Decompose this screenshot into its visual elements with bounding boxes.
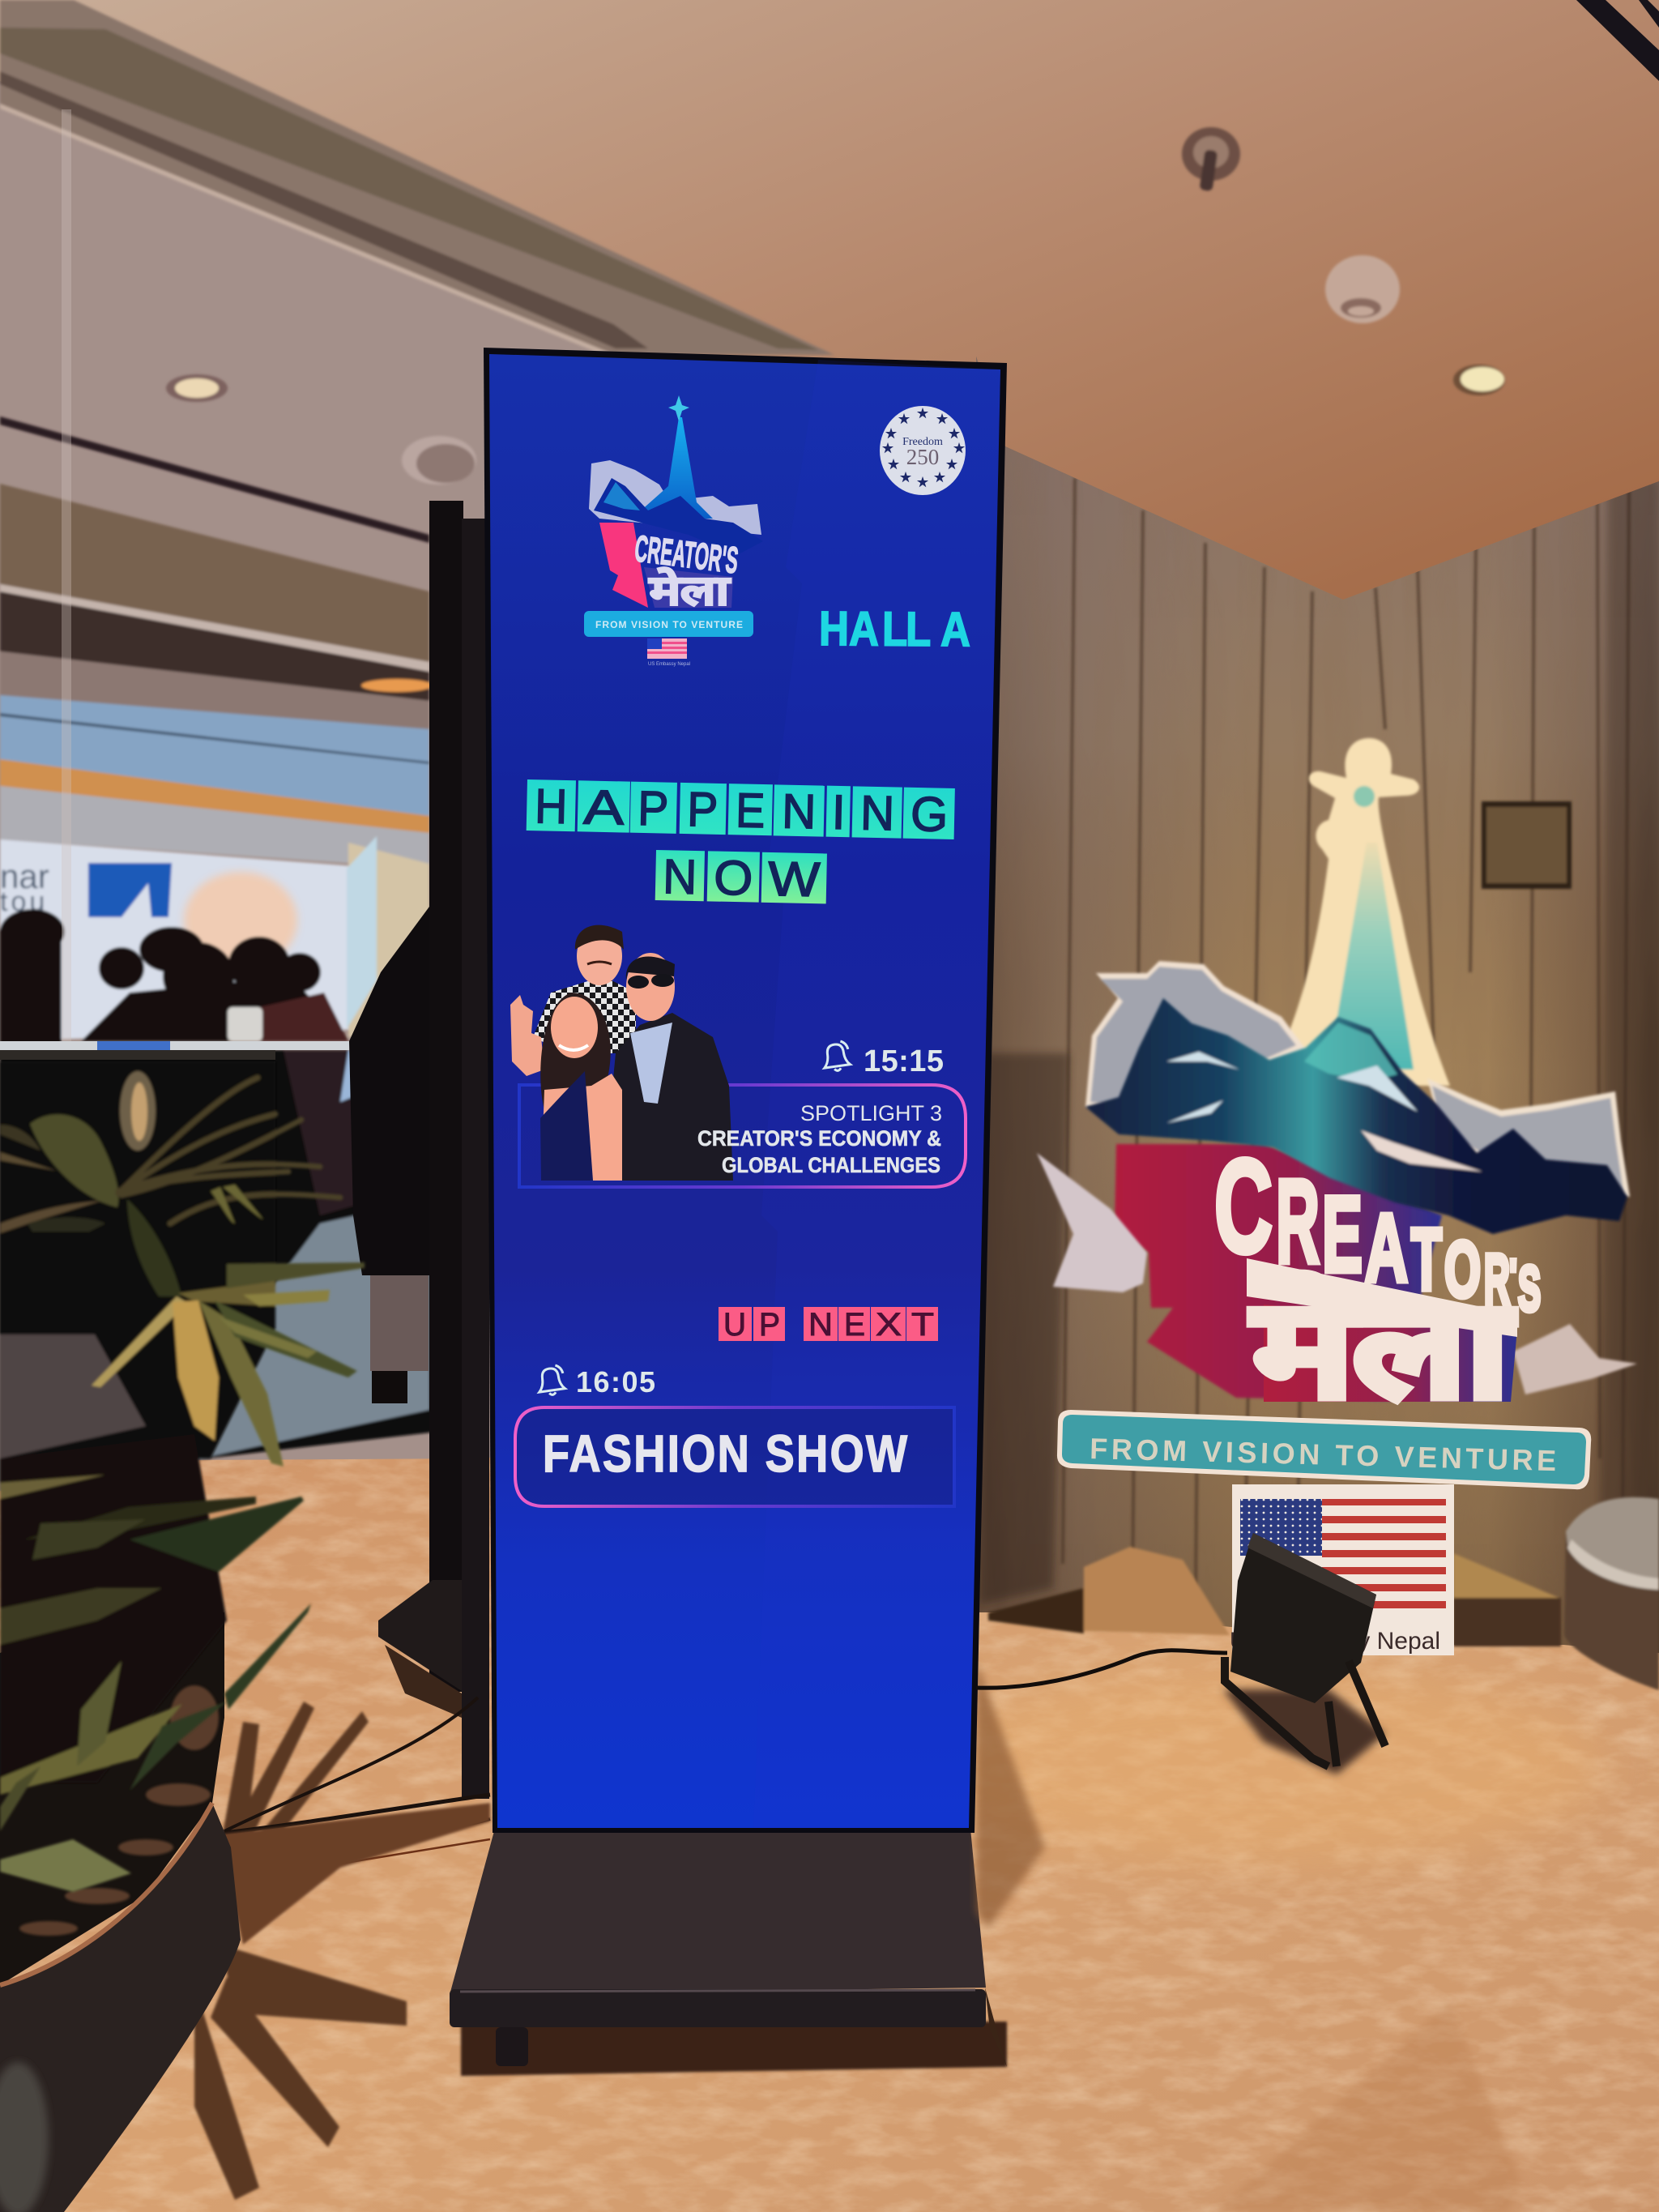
Up Next tiles: U bbox=[723, 1307, 746, 1343]
woman in navy dress bbox=[540, 993, 622, 1181]
logo red block bbox=[599, 523, 648, 608]
logo flag: US Embassy Nepal bbox=[648, 662, 690, 667]
caster wheel bbox=[496, 2027, 528, 2066]
glass shelf bbox=[0, 1041, 437, 1060]
standee red backing block bbox=[1115, 1144, 1442, 1401]
Freedom 250 badge: ★ bbox=[916, 407, 929, 421]
Fashion Show neon frame bbox=[515, 1407, 954, 1506]
Creator's Mela screen logo bbox=[584, 395, 763, 667]
standee left network shard bbox=[1037, 1153, 1147, 1292]
Happening tiles: G bbox=[911, 787, 949, 842]
standee beam and star bbox=[1264, 738, 1450, 1086]
Fashion Show title: FASHION SHOW bbox=[543, 1425, 907, 1483]
time 16:05 bbox=[536, 1364, 655, 1399]
Up Next tiles: N bbox=[808, 1307, 833, 1343]
standee wordmark: R bbox=[1276, 1155, 1320, 1288]
ceiling sprinkler bbox=[1182, 127, 1240, 191]
time 15:15: 15:15 bbox=[864, 1044, 944, 1078]
standee wordmark: O bbox=[1444, 1225, 1481, 1313]
reflected lower scene bbox=[0, 1050, 486, 1491]
palm plant bbox=[0, 1061, 365, 1892]
Freedom 250 badge: ★ bbox=[898, 412, 911, 426]
lit floor in wall recess bbox=[988, 1547, 1561, 1646]
Freedom 250 badge: ★ bbox=[885, 427, 898, 441]
reflected brand logo bbox=[0, 857, 172, 917]
Freedom 250 badge bbox=[880, 406, 966, 495]
standee mountains bbox=[1085, 998, 1627, 1234]
bell icon bbox=[536, 1364, 565, 1397]
Happening tiles: P bbox=[638, 781, 669, 836]
Freedom 250 badge: ★ bbox=[887, 458, 900, 472]
logo clouds bbox=[589, 460, 761, 535]
spotlight text: GLOBAL CHALLENGES bbox=[722, 1153, 940, 1177]
Freedom 250 badge: ★ bbox=[916, 476, 929, 489]
logo light beam bbox=[632, 417, 713, 519]
Freedom 250 badge: ★ bbox=[881, 442, 894, 455]
standee wordmark: A bbox=[1365, 1194, 1408, 1302]
spotlight text: CREATOR'S ECONOMY & bbox=[697, 1126, 941, 1151]
reflected recessed light bbox=[166, 374, 228, 402]
Happening tiles: I bbox=[831, 785, 846, 839]
standee Mela block bbox=[1247, 1258, 1517, 1424]
spotlight neon frame bbox=[519, 1085, 966, 1187]
hall label: HALL A bbox=[819, 601, 970, 656]
standee back clouds bbox=[1085, 961, 1630, 1197]
Happening tiles: N bbox=[782, 784, 817, 839]
floor bbox=[0, 1402, 1659, 2212]
beam across ceiling bbox=[0, 0, 834, 355]
logo wordmark bbox=[633, 527, 740, 613]
Happening tiles: N bbox=[860, 786, 895, 840]
Freedom 250 badge: ★ bbox=[948, 427, 961, 441]
logo tagline bar bbox=[584, 611, 753, 637]
LED screen bbox=[484, 348, 1007, 1833]
green leaflets bbox=[211, 1185, 263, 1223]
wall plaque bbox=[1482, 801, 1572, 889]
Up Next tiles: X bbox=[876, 1307, 902, 1343]
reflected phone bbox=[228, 1007, 262, 1041]
standee tagline banner bbox=[1057, 1410, 1591, 1489]
bell icon bbox=[821, 1040, 851, 1073]
reflected crowd silhouettes bbox=[0, 909, 348, 1045]
spotlight text bbox=[697, 1101, 942, 1177]
digital signage base bbox=[450, 1829, 1007, 2076]
logo tagline bar: FROM VISION TO VENTURE bbox=[595, 619, 743, 630]
logo flag bbox=[647, 638, 690, 667]
Now tiles: O bbox=[714, 851, 753, 905]
standee tagline banner: FROM VISION TO VENTURE bbox=[1090, 1432, 1557, 1477]
standee wordmark: T bbox=[1411, 1210, 1442, 1308]
wood panel wall bbox=[976, 357, 1659, 1653]
Freedom 250 badge: ★ bbox=[945, 458, 958, 472]
Up Next tiles bbox=[719, 1307, 938, 1343]
standee flag panel bbox=[1230, 1484, 1454, 1655]
recessed ceiling light bbox=[1453, 365, 1505, 395]
logo star bbox=[668, 395, 689, 421]
power cable bbox=[976, 1650, 1227, 1688]
sunglasses bbox=[628, 974, 674, 989]
standee wordmark: E bbox=[1322, 1175, 1363, 1295]
back man bbox=[510, 925, 636, 1076]
Up Next tiles: T bbox=[911, 1307, 934, 1343]
spotlight text: SPOTLIGHT 3 bbox=[800, 1101, 942, 1125]
standee flag panel: US Embassy Nepal bbox=[1230, 1628, 1440, 1655]
lower fronds bbox=[0, 1475, 311, 1892]
shadow cast by signage bbox=[976, 1661, 1045, 1928]
black ceiling track bbox=[1576, 0, 1659, 81]
Up Next tiles: P bbox=[759, 1307, 780, 1343]
person in dark coat bbox=[349, 907, 433, 1403]
standee wordmark: R bbox=[1484, 1241, 1510, 1319]
ceiling bbox=[0, 0, 1659, 648]
Happening tiles: P bbox=[687, 782, 719, 837]
cables on floor bbox=[224, 1697, 490, 1864]
stage light bbox=[976, 1533, 1385, 1774]
standee wordmark: ' bbox=[1510, 1252, 1516, 1297]
soil and dry leaves bbox=[19, 1630, 219, 1936]
reflected brand logo: nar bbox=[0, 857, 49, 895]
Happening tiles bbox=[527, 779, 955, 842]
Now tiles: W bbox=[768, 852, 821, 907]
broad leaves bbox=[0, 1114, 181, 1296]
time 16:05: 16:05 bbox=[576, 1365, 655, 1399]
speakers photo bbox=[510, 925, 733, 1181]
logo mountains bbox=[594, 478, 763, 555]
Now tiles bbox=[655, 849, 827, 907]
time 15:15 bbox=[821, 1040, 944, 1078]
logo wordmark: मेला bbox=[649, 567, 731, 613]
Happening tiles: H bbox=[535, 779, 568, 834]
smoke detector bbox=[1325, 255, 1400, 323]
Freedom 250 badge: ★ bbox=[933, 471, 946, 485]
plant shadow on floor bbox=[194, 1702, 407, 2200]
standee right network shard bbox=[1513, 1324, 1637, 1394]
Freedom 250 badge: ★ bbox=[899, 471, 912, 485]
lit palm frond bbox=[92, 1262, 365, 1467]
Happening tiles: E bbox=[736, 783, 766, 838]
reflected brand logo: tou bbox=[0, 886, 48, 917]
Freedom 250 badge: ★ bbox=[953, 442, 966, 455]
upper thin fronds bbox=[118, 1078, 340, 1223]
Freedom 250 badge: ★ bbox=[936, 412, 949, 426]
planter pots bbox=[0, 1612, 241, 2212]
standee Mela block: मेला bbox=[1251, 1273, 1515, 1424]
standee wordmark: C bbox=[1214, 1132, 1273, 1280]
standee wordmark: S bbox=[1518, 1253, 1541, 1324]
standee wordmark bbox=[1214, 1132, 1541, 1324]
left mirrored wall with reflections bbox=[0, 81, 616, 1491]
Happening tiles: A bbox=[583, 779, 625, 835]
mirror seam strip bbox=[62, 109, 71, 1041]
display stand pole bbox=[378, 501, 489, 1799]
reflected round speaker bbox=[402, 436, 476, 485]
trash bin bbox=[1564, 1497, 1659, 1690]
Up Next tiles: E bbox=[844, 1307, 865, 1343]
right man in suit bbox=[603, 953, 733, 1181]
hanging ornament bbox=[120, 1071, 156, 1151]
Freedom 250 badge: 250 bbox=[906, 445, 939, 469]
Freedom 250 badge: Freedom bbox=[902, 436, 943, 448]
Now tiles: N bbox=[663, 849, 697, 904]
Creator's Mela screen logo: CREATOR'S bbox=[633, 527, 740, 582]
Creator's Mela standee bbox=[1037, 738, 1637, 1655]
